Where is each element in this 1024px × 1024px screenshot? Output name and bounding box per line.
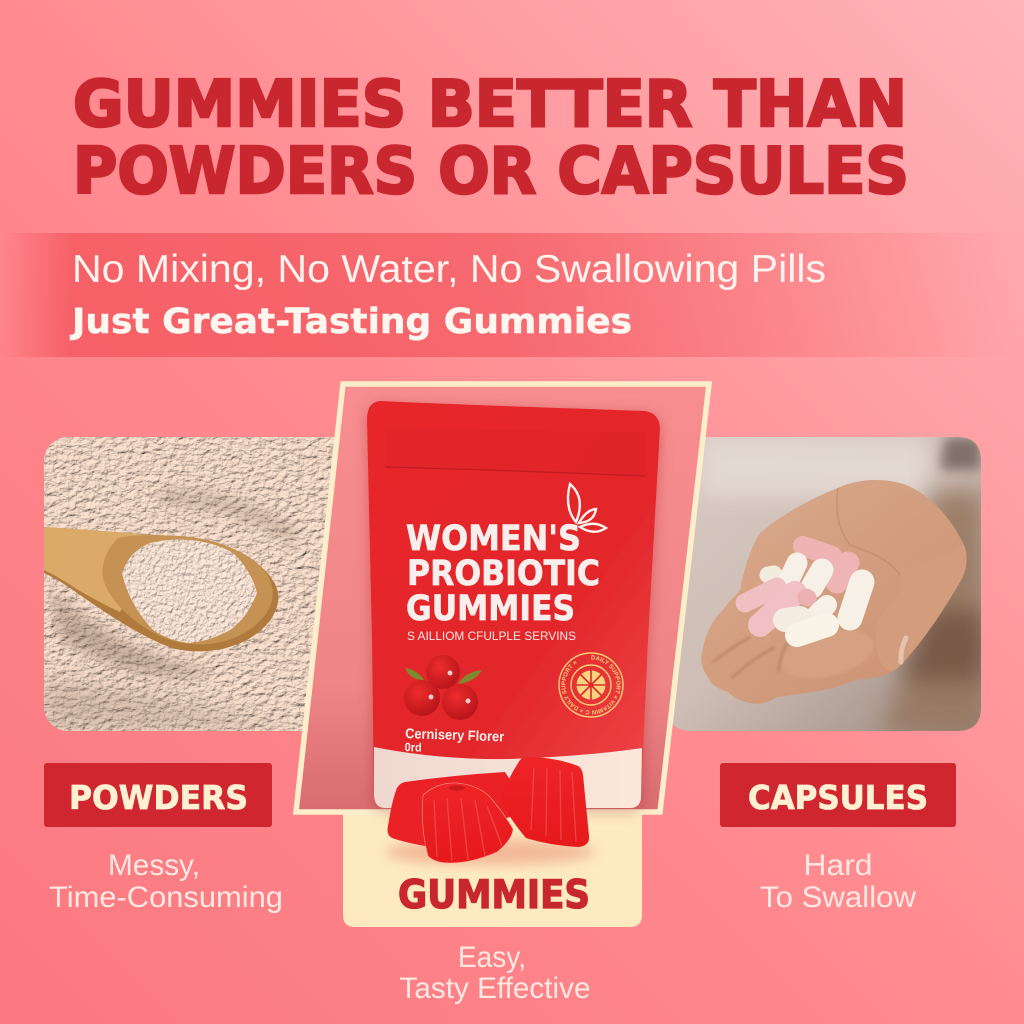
panel: capsules label [720, 763, 956, 827]
title [73, 68, 909, 209]
product name [404, 725, 505, 757]
pouch title: GUMMIES [406, 589, 575, 629]
pouch title: WOMEN'S [406, 519, 581, 559]
product name: Cernisery Florer [405, 725, 505, 744]
panel: gummies label: GUMMIES [398, 873, 590, 918]
text: gummies description: Tasty Effective [400, 972, 590, 1005]
panel: highlighted frame [296, 384, 709, 812]
text: powders description [49, 849, 283, 914]
icon: capsules [745, 546, 862, 635]
panel: capsules label: CAPSULES [748, 778, 928, 817]
icon: leaf logo [568, 484, 606, 532]
icon: gummy candies [385, 757, 595, 865]
pouch subtitle: S AILLIOM CFULPLE SERVINS [407, 629, 576, 643]
finger separators [712, 637, 787, 678]
text: capsules description: Hard [804, 849, 872, 882]
icon: cherries [404, 655, 482, 720]
panel: powders label [44, 763, 272, 827]
gummy: front [422, 783, 513, 863]
subtitle band: No Mixing, No Water, No Swallowing Pills [72, 248, 826, 291]
pouch base panel [374, 747, 642, 808]
icon: wooden spoon [44, 527, 278, 655]
icon: open hand [701, 480, 967, 704]
pouch title [406, 519, 600, 629]
gummy: back left [388, 772, 530, 846]
subtitle band: Just Great-Tasting Gummies [70, 302, 632, 342]
panel: product pouch [362, 399, 665, 819]
powder heap [122, 540, 257, 643]
text: capsules description [760, 849, 916, 914]
panel: gummies label [343, 800, 642, 927]
text: gummies description: Easy, [458, 941, 526, 974]
subtitle band [0, 233, 1024, 357]
pouch title: PROBIOTIC [407, 554, 600, 594]
panel: powders label: POWDERS [69, 778, 248, 817]
index finger [788, 632, 873, 677]
product name: 0rd [404, 740, 422, 755]
title: POWDERS OR CAPSULES [73, 135, 909, 209]
gummy: right [500, 757, 589, 847]
text: capsules description: To Swallow [760, 881, 916, 914]
text: gummies description [400, 941, 590, 1005]
panel: hand with capsules photo [660, 437, 985, 735]
title: GUMMIES BETTER THAN [73, 68, 907, 142]
thumb [894, 546, 967, 670]
text: powders description: Time-Consuming [49, 881, 283, 914]
panel: powder photo [44, 437, 354, 731]
text: powders description: Messy, [108, 849, 200, 882]
icon: citrus badge: DAILY SUPPORT × VITAMIN C × DAILY SUPPORT × [561, 655, 621, 715]
